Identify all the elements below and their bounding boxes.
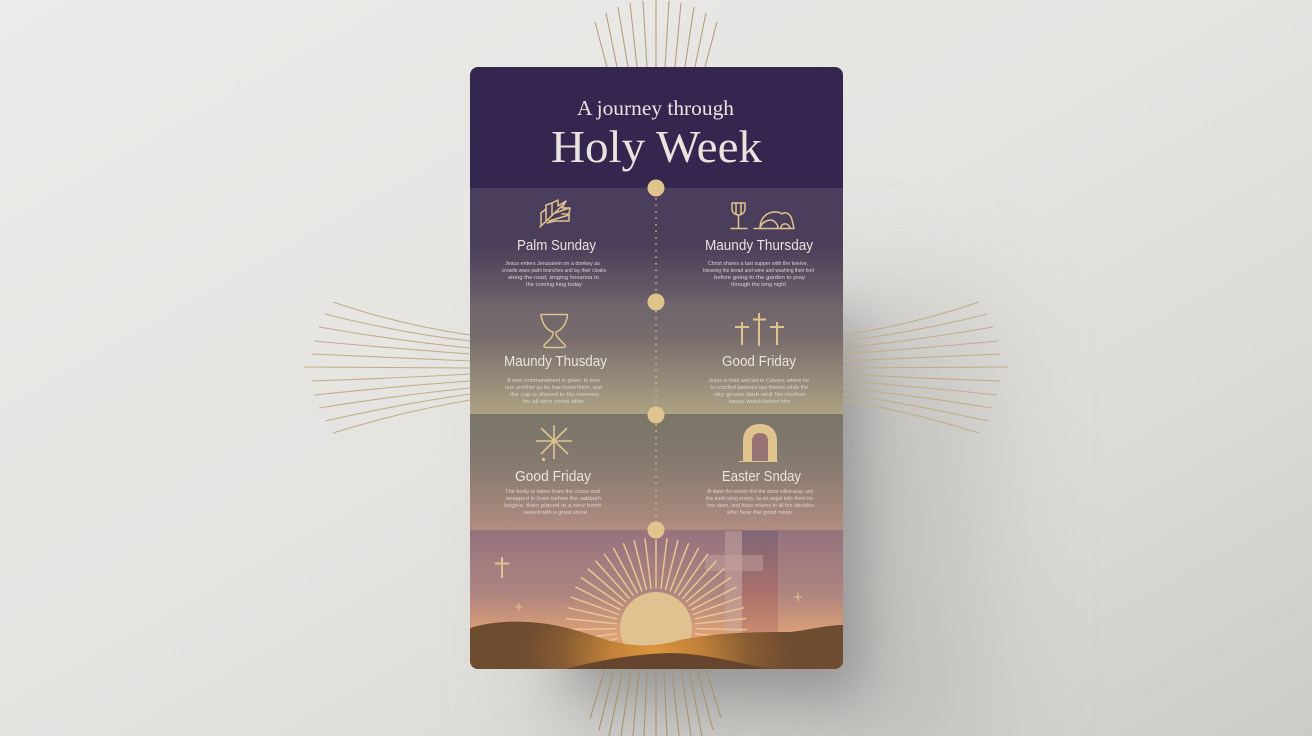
heading: Maundy Thusday bbox=[504, 354, 608, 370]
sun rays bbox=[566, 539, 746, 651]
body text bbox=[504, 489, 601, 516]
heading: Good Friday bbox=[722, 354, 797, 370]
header band bbox=[470, 67, 843, 188]
icon: starburst bbox=[536, 425, 572, 460]
item: Good Friday star bbox=[504, 425, 601, 516]
body text: the cup is shared in his memory bbox=[510, 392, 600, 398]
icon: chalice bbox=[541, 314, 568, 348]
body text: keeps watch below him bbox=[729, 399, 790, 405]
body text: before going to the garden to pray bbox=[714, 275, 806, 281]
body text bbox=[703, 261, 815, 288]
body text: the coming king today bbox=[526, 282, 583, 288]
sparkle right bbox=[794, 592, 802, 602]
body text: wrapped in linen before the sabbath bbox=[506, 496, 601, 502]
heading: Good Friday bbox=[515, 469, 592, 485]
body text: blessing the bread and wine and washing their feet bbox=[703, 268, 815, 274]
front hill bbox=[566, 653, 770, 669]
body text: one another as he has loved them, and bbox=[505, 385, 602, 391]
title bbox=[551, 96, 762, 172]
sun bbox=[620, 592, 692, 646]
icon: empty tomb arch bbox=[739, 424, 778, 462]
icon: palm leaf bbox=[540, 200, 570, 227]
row 2 band bbox=[470, 302, 843, 414]
body text: sky grows dark and his mother bbox=[714, 392, 806, 398]
body text: along the road, singing hosanna to bbox=[508, 275, 599, 281]
row 1 band bbox=[470, 188, 843, 302]
heading: Maundy Thursday bbox=[705, 238, 814, 254]
item: Good Friday bbox=[708, 313, 809, 405]
body text: begins, then placed in a new tomb bbox=[504, 503, 601, 509]
body text bbox=[706, 489, 815, 516]
item: Maundy Thursday bbox=[703, 203, 815, 288]
heading: Easter Snday bbox=[722, 469, 802, 485]
body text: sealed with a great stone bbox=[523, 510, 587, 516]
body text: has risen, and hope returns to all the disciples bbox=[707, 503, 815, 509]
rays: top bbox=[595, 0, 717, 67]
sparkle left bbox=[516, 603, 522, 611]
timeline bbox=[648, 180, 664, 538]
item: Easter Sunday bbox=[706, 424, 815, 516]
body text bbox=[708, 378, 809, 405]
rays: bottom bbox=[590, 669, 721, 736]
body text: Jesus enters Jerusalem on a donkey as bbox=[505, 261, 601, 267]
title line two: Holy Week bbox=[551, 121, 762, 172]
icon: three crosses bbox=[735, 313, 784, 346]
body text: who hear the good news bbox=[727, 510, 793, 516]
title line one: A journey through bbox=[577, 96, 735, 120]
body text: crowds wave palm branches and lay their cloaks bbox=[502, 268, 606, 274]
body text: A new commandment is given: to love bbox=[507, 378, 600, 384]
body text: Jesus is tried and led to Calvary, where he bbox=[708, 378, 809, 384]
body text: is crucified between two thieves while the bbox=[711, 385, 808, 391]
rays: right bbox=[843, 302, 1008, 433]
item: Maundy Thusday bbox=[504, 314, 608, 405]
large cross silhouette bbox=[705, 531, 778, 633]
row 3 band bbox=[470, 414, 843, 530]
body text: the tomb lying empty, as an angel tells them he bbox=[706, 496, 813, 502]
body text bbox=[505, 378, 602, 405]
icon: cup and bread bbox=[731, 203, 794, 228]
rays: left bbox=[304, 302, 470, 433]
body text: At dawn the women find the stone rolled away and bbox=[707, 489, 813, 495]
heading: Palm Sunday bbox=[517, 238, 597, 254]
item: Palm Sunday bbox=[502, 200, 606, 288]
small cross bbox=[495, 557, 509, 578]
back hill bbox=[470, 622, 843, 669]
sunrise scene bbox=[470, 530, 843, 669]
body text: through the long night bbox=[731, 282, 787, 288]
body text: The body is taken from the cross and bbox=[505, 489, 600, 495]
body text bbox=[502, 261, 606, 288]
body text: for all who come after bbox=[523, 399, 584, 405]
body text: Christ shares a last supper with the twelve, bbox=[708, 261, 808, 267]
infographic card bbox=[470, 67, 843, 669]
